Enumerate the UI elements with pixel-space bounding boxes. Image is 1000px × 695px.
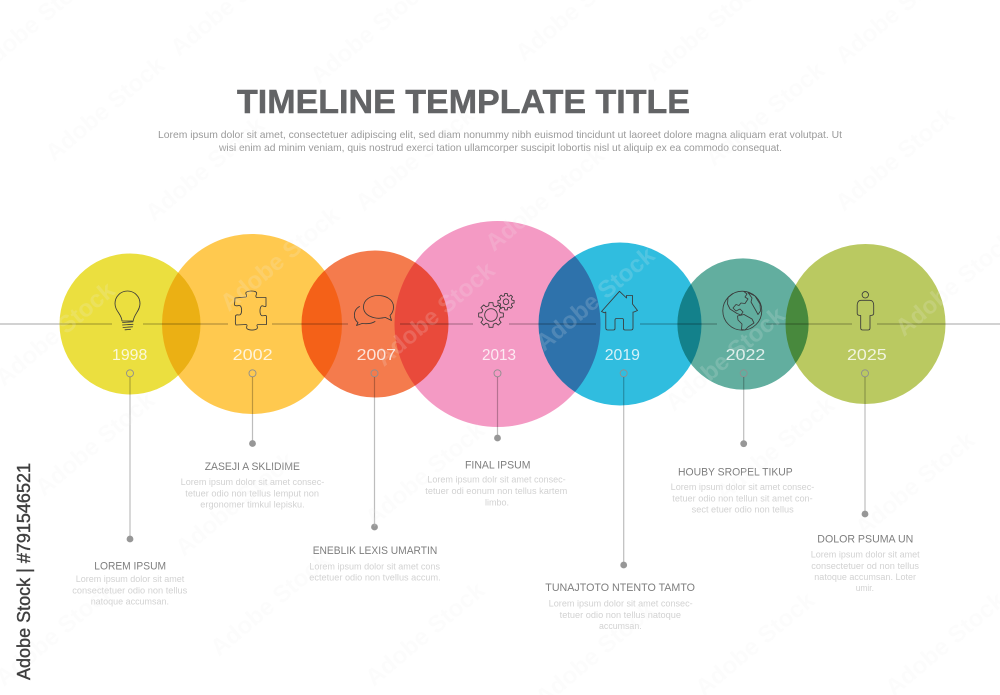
milestone 2022: 2022 (726, 347, 765, 364)
milestone 2025 (811, 347, 920, 593)
overlapping timeline circles (60, 221, 946, 427)
stock watermark pattern: Adobe Stock (360, 416, 491, 532)
milestone 2025: umir. (856, 583, 874, 593)
milestone 2007: ectetuer odio non tvellus accum. (309, 572, 441, 582)
milestone 2013: 2013 (482, 347, 516, 364)
milestone 1998: natoque accumsan. (91, 597, 169, 607)
icon: chat bubbles (354, 296, 394, 326)
milestone 2002: Lorem ipsum dolor sit amet consec- (181, 477, 324, 487)
icon: gears (479, 294, 514, 327)
milestone 1998 (72, 347, 188, 607)
milestone 2019: tetuer odio non tellus natoque (560, 610, 681, 620)
milestone 2007: 2007 (357, 347, 396, 364)
milestone 2007 (309, 347, 441, 582)
icon: house (602, 291, 638, 330)
stock watermark pattern: Adobe Stock (850, 426, 981, 542)
stock watermark pattern: Adobe Stock (140, 111, 271, 227)
milestone 2002 (181, 347, 324, 509)
stock watermark pattern: Adobe Stock (480, 141, 611, 257)
stock watermark pattern: Adobe Stock (350, 101, 481, 217)
icon: person (857, 292, 874, 330)
milestone 2007: ENEBLIK LEXIS UMARTIN (313, 545, 437, 557)
milestone 2013: FINAL IPSUM (465, 460, 530, 472)
milestone 1998: consectetuer odio non tellus (72, 585, 188, 595)
icon: puzzle piece (234, 291, 266, 330)
milestone 2013: limbo. (485, 497, 509, 507)
milestone 2002: ZASEJI A SKLIDIME (205, 461, 300, 473)
stock watermark pattern: Adobe Stock (40, 51, 171, 167)
milestone 2025: DOLOR PSUMA UN (817, 534, 913, 546)
intro text (158, 129, 842, 154)
milestone 2022: sect etuer odio non tellus (692, 505, 794, 515)
stock watermark pattern: Adobe Stock (370, 256, 501, 372)
milestone 1998: 1998 (112, 347, 147, 364)
stock watermark pattern: Adobe Stock (530, 241, 661, 357)
milestone 2002: tetuer odio non tellus lemput non (185, 488, 319, 498)
milestone 2013 (425, 347, 567, 507)
milestone 2022: Lorem ipsum dolor sit amet consec- (671, 482, 814, 492)
intro text: wisi enim ad minim veniam, quis nostrud exerci tation ullamcorper suscipit lobortis nisl ut aliquip ex ea commodo consequat. (218, 142, 782, 154)
milestone 2002: ergonomer timkul lepisku. (200, 499, 305, 509)
milestone 2019: Lorem ipsum dolor sit amet consec- (549, 599, 693, 609)
milestone 2019: 2019 (605, 347, 640, 364)
milestone 2022 (671, 347, 814, 515)
milestone 2025: 2025 (847, 347, 887, 364)
stock id side label: Adobe Stock | #791546521 (14, 463, 34, 680)
milestone 2019: accumsan. (599, 621, 642, 631)
stock watermark pattern: Adobe Stock (660, 301, 791, 417)
milestone 2007: Lorem ipsum dolor sit amet cons (309, 561, 440, 571)
milestone 2025: natoque accumsan. Loter (814, 572, 916, 582)
stock watermark pattern: Adobe Stock (30, 386, 161, 502)
horizontal timeline axis (0, 323, 1000, 325)
stock watermark pattern: Adobe Stock (205, 546, 336, 662)
stock watermark pattern: Adobe Stock (830, 101, 961, 217)
icon: globe (723, 291, 762, 330)
milestone 2025: consectetuer od non tellus (811, 561, 920, 571)
milestone 2002: 2002 (233, 347, 273, 364)
milestone 2025: Lorem ipsum dolor sit amet (811, 550, 920, 560)
stock watermark pattern: Adobe Stock (700, 56, 831, 172)
intro text: Lorem ipsum dolor sit amet, consectetuer adipiscing elit, sed diam nonummy nibh euismod tincidunt ut laoreet dolore magna aliquam erat volutpat. Ut (158, 129, 842, 141)
milestone 2022: tetuer odio non tellun sit amet con- (672, 493, 813, 503)
stock watermark pattern: Adobe Stock (360, 576, 491, 692)
milestone 2013: tetuer odi eonum non tellus kartem (425, 486, 567, 496)
milestone 1998: Lorem ipsum dolor sit amet (76, 574, 185, 584)
milestone 2019 (545, 347, 695, 631)
milestone 2013: Lorem ipsum dolr sit amet consec- (427, 475, 566, 485)
milestone 2019: TUNAJTOTO NTENTO TAMTO (545, 582, 695, 594)
milestone 2022: HOUBY SROPEL TIKUP (678, 466, 793, 478)
icon: light bulb (115, 291, 140, 330)
title: TIMELINE TEMPLATE TITLE (237, 84, 690, 121)
milestone 1998: LOREM IPSUM (94, 560, 166, 572)
stock watermark pattern: Adobe Stock (170, 446, 301, 562)
stock watermark pattern: Adobe Stock (710, 391, 841, 507)
stock watermark pattern: Adobe Stock (215, 201, 346, 317)
